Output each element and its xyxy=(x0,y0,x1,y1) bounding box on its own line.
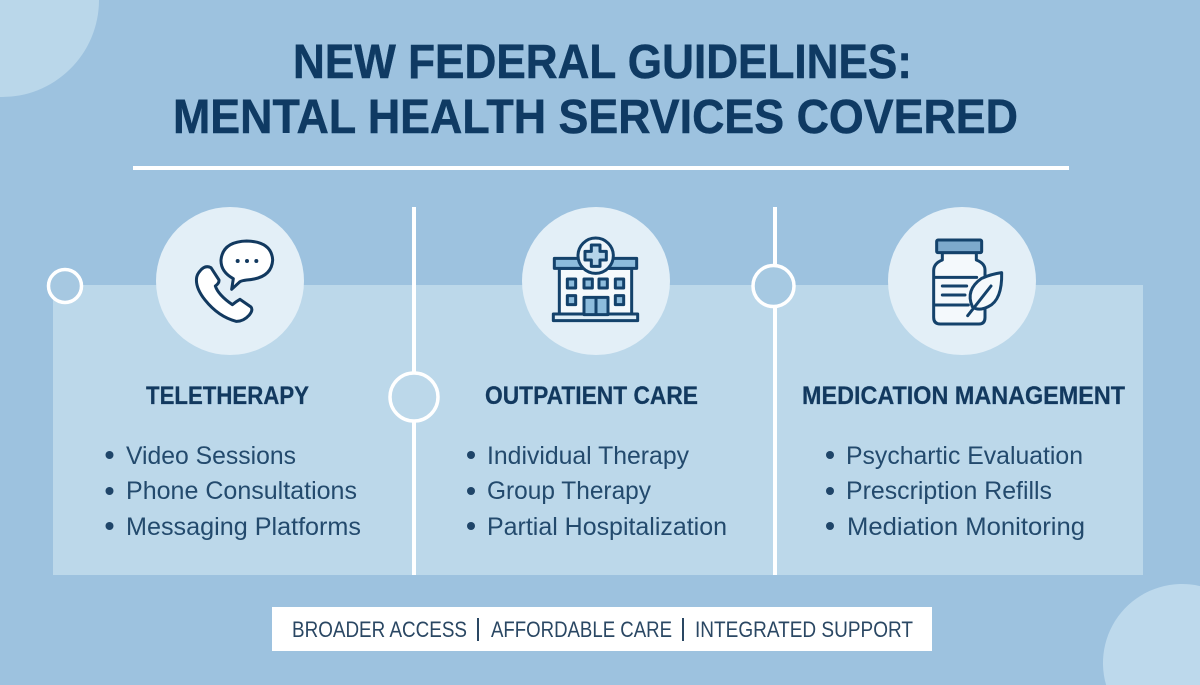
panel: services background xyxy=(53,285,1143,575)
list: medication services: Prescription Refills xyxy=(846,477,1052,505)
list: teletherapy services: Phone Consultations xyxy=(126,477,357,505)
heading: medication management: MEDICATION MANAGEMENT xyxy=(802,382,1125,410)
title: MENTAL HEALTH SERVICES COVERED xyxy=(173,91,1018,144)
list: outpatient services: Individual Therapy xyxy=(487,442,689,470)
footer banner: BROADER ACCESS xyxy=(292,617,467,642)
title: NEW FEDERAL GUIDELINES: xyxy=(293,36,912,89)
panel: medication management xyxy=(802,207,1125,541)
decorative corner shape top left xyxy=(0,0,99,97)
heading: outpatient care: OUTPATIENT CARE xyxy=(485,382,698,410)
list: outpatient services xyxy=(467,442,727,541)
list: medication services: Psychartic Evaluation xyxy=(846,442,1083,470)
panel: outpatient care xyxy=(467,207,727,541)
icon: hospital building xyxy=(522,207,670,355)
list: medication services: Mediation Monitoring xyxy=(847,513,1085,541)
icon: medicine bottle with leaf xyxy=(888,207,1036,355)
footer banner: INTEGRATED SUPPORT xyxy=(695,617,913,642)
title xyxy=(173,36,1018,144)
decorative corner shape bottom right xyxy=(1103,584,1200,685)
footer banner: AFFORDABLE CARE xyxy=(491,617,672,642)
list: outpatient services: Partial Hospitalization xyxy=(487,513,727,541)
list: teletherapy services xyxy=(106,442,361,541)
node circle left xyxy=(48,270,82,302)
footer banner xyxy=(272,607,932,651)
node circle right xyxy=(753,266,794,306)
list: teletherapy services: Video Sessions xyxy=(126,442,296,470)
heading: teletherapy: TELETHERAPY xyxy=(146,382,309,410)
icon: phone with speech bubble xyxy=(156,207,304,355)
list: medication services xyxy=(826,442,1085,541)
panel: teletherapy xyxy=(106,207,361,541)
node circle middle xyxy=(390,373,438,421)
list: outpatient services: Group Therapy xyxy=(487,477,651,505)
list: teletherapy services: Messaging Platforms xyxy=(126,513,361,541)
